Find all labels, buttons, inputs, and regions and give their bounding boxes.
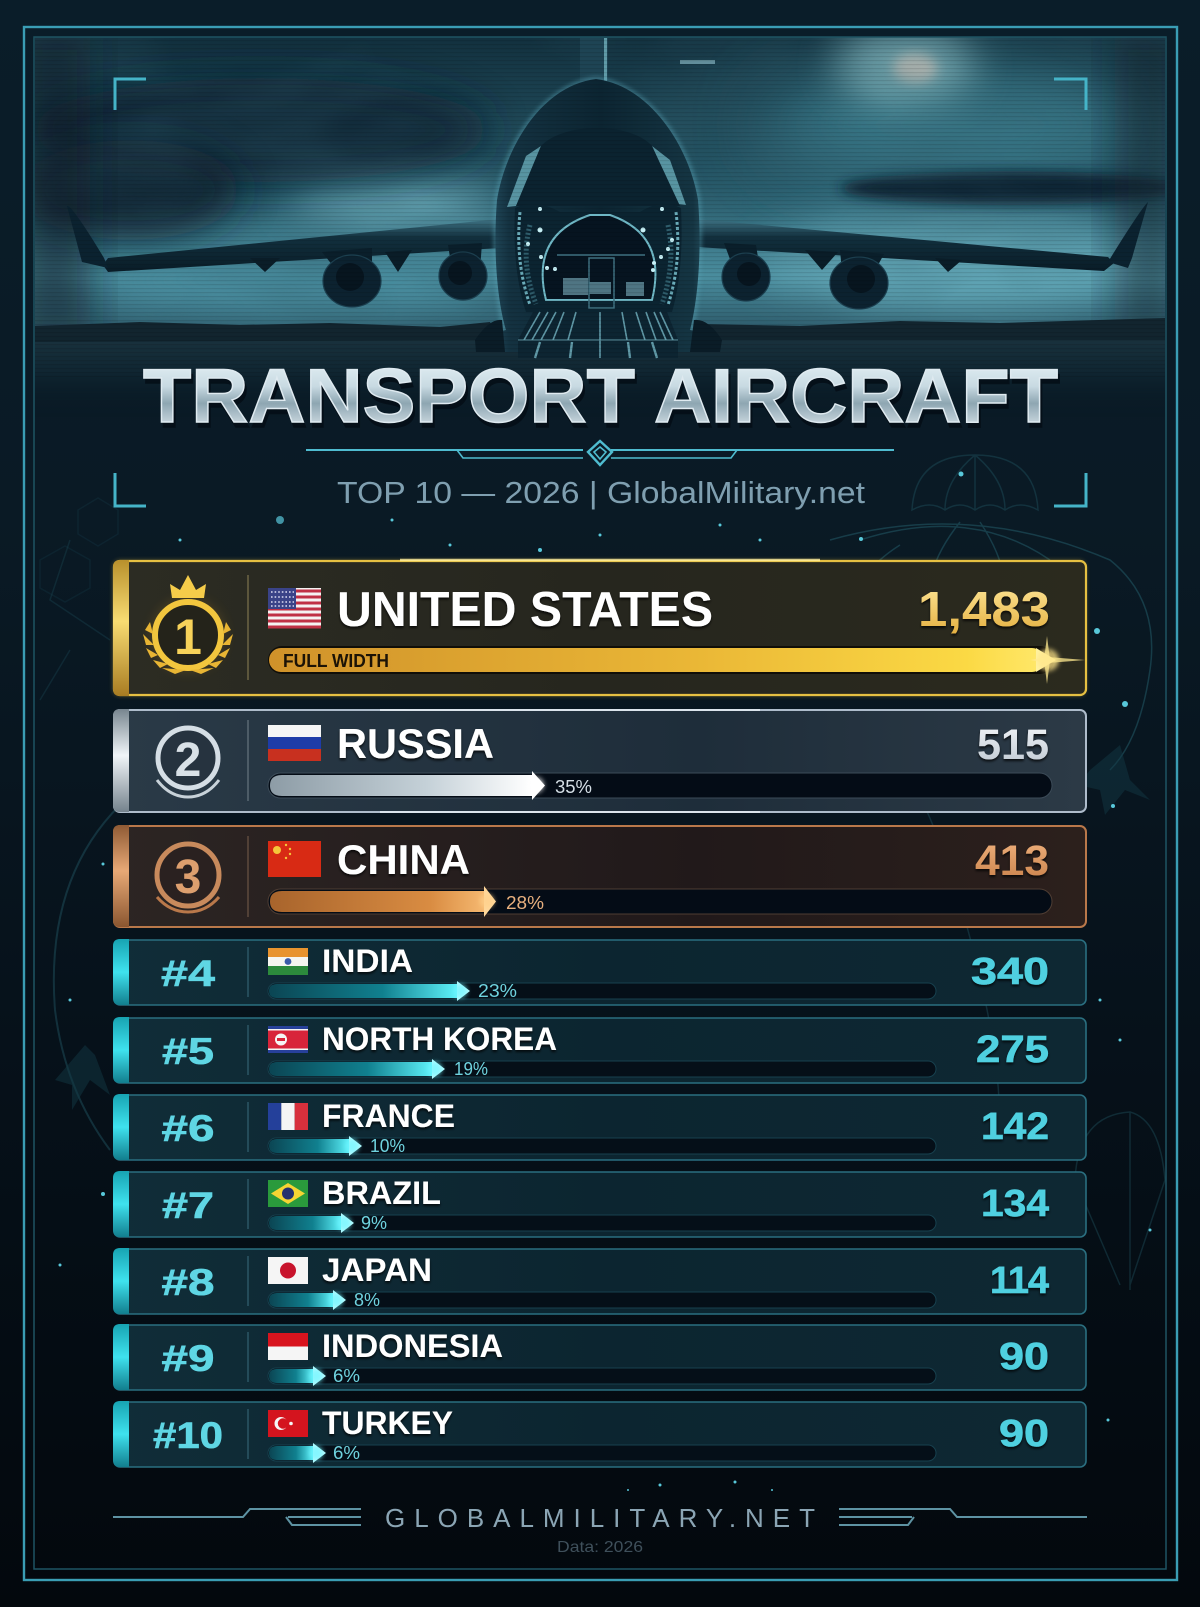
landing gear: [475, 320, 722, 352]
flag: China: [268, 841, 321, 877]
panel: rank 2 Russia: [113, 709, 1086, 812]
hexagons: [40, 498, 118, 602]
progress bar: [268, 1366, 936, 1386]
country name: FRANCE: [322, 1098, 455, 1134]
progress bar: [268, 981, 936, 1001]
progress bar: [268, 1213, 936, 1233]
progress bar: 19%: [454, 1059, 488, 1079]
footer site name: GLOBALMILITARY.NET: [385, 1503, 815, 1533]
medal: gold 1: 1: [174, 609, 202, 665]
particles: [58, 472, 1152, 1491]
rank label: #10: [153, 1415, 223, 1456]
value: 134: [981, 1183, 1049, 1225]
progress bar: [268, 1443, 936, 1463]
rim glow: [496, 79, 596, 340]
data note: Data: 2026: [557, 1539, 643, 1556]
flag: Brazil: [268, 1180, 308, 1207]
rank label: #6: [162, 1108, 214, 1149]
corner brackets: [115, 79, 1086, 506]
panel: rank 9 Indonesia: [113, 1324, 1086, 1390]
value: 275: [976, 1029, 1049, 1071]
medal: silver 2: 2: [175, 734, 201, 787]
fuselage: [480, 79, 722, 352]
flag: France: [268, 1103, 308, 1130]
left wing: [103, 219, 500, 272]
progress bar: 35%: [555, 777, 592, 797]
country name: INDIA: [322, 943, 413, 979]
cargo bay: [514, 204, 682, 312]
panel: rank 4 India: [113, 939, 1086, 1005]
flag: USA: [268, 588, 321, 628]
panel: rank 3 China: [113, 825, 1086, 927]
country name: TURKEY: [322, 1405, 453, 1441]
scanline overlay: [35, 37, 1165, 377]
value: 114: [990, 1260, 1049, 1302]
panel: rank 6 France: [113, 1094, 1086, 1160]
globe arcs: [830, 524, 1152, 770]
hero: sky and runway: [35, 38, 1165, 376]
title: TRANSPORT AIRCRAFT: [145, 359, 1060, 444]
country name: UNITED STATES: [337, 583, 713, 637]
progress bar: [268, 1136, 936, 1156]
flag: North Korea: [268, 1026, 308, 1053]
bay lights: [526, 207, 674, 272]
progress bar: [268, 636, 1085, 684]
flag: Indonesia: [268, 1333, 308, 1360]
upper door: [516, 128, 680, 206]
background motif: parachutes, globe and planes: [40, 455, 1165, 1290]
medal: bronze 3: 3: [175, 851, 201, 904]
parachute lower: [1075, 1112, 1165, 1290]
flag: Russia: [268, 725, 321, 761]
value: 340: [971, 951, 1049, 993]
flag: Japan: [268, 1257, 308, 1284]
tail fin: [580, 38, 608, 86]
engines: [323, 252, 888, 309]
panel: rank 5 North Korea: [113, 1017, 1086, 1083]
pylons: [322, 243, 884, 280]
footer ornaments: [113, 1509, 1087, 1525]
rank label: #8: [162, 1262, 214, 1303]
right wing: [696, 219, 1114, 271]
rank label: #9: [162, 1338, 214, 1379]
winglets: [67, 202, 1148, 268]
country name: JAPAN: [322, 1252, 432, 1288]
country name: RUSSIA: [337, 720, 494, 767]
country name: NORTH KOREA: [322, 1021, 557, 1057]
background planes: [55, 745, 1150, 1110]
progress bar: 6%: [333, 1443, 360, 1463]
progress bar: [268, 771, 1052, 800]
country name: BRAZIL: [322, 1175, 441, 1211]
progress bar: 23%: [478, 981, 517, 1001]
panel: rank 7 Brazil: [113, 1171, 1086, 1237]
value: 515: [977, 721, 1049, 769]
panel: rank 8 Japan: [113, 1248, 1086, 1314]
progress bar: 10%: [370, 1136, 405, 1156]
parachute upper: [912, 455, 1038, 510]
loading ramp: [518, 312, 678, 358]
progress bar: 8%: [354, 1290, 380, 1310]
value: 142: [981, 1106, 1049, 1148]
progress bar: 9%: [361, 1213, 387, 1233]
subtitle: TOP 10 — 2026 | GlobalMilitary.net: [337, 475, 865, 510]
medal: gold 1: [143, 575, 233, 674]
progress bar: [268, 886, 1052, 917]
progress bar: 28%: [506, 893, 544, 913]
progress bar: [268, 1059, 936, 1079]
country name: INDONESIA: [322, 1328, 503, 1364]
value: 90: [999, 1336, 1049, 1378]
value: 90: [999, 1413, 1049, 1455]
rank label: #5: [162, 1031, 214, 1072]
cargo pallets: [563, 278, 644, 296]
transport aircraft: [67, 38, 1148, 358]
flag: Turkey: [268, 1410, 308, 1437]
title: TRANSPORT AIRCRAFT: [143, 354, 1058, 439]
panel: rank 1 United States: [113, 560, 1086, 696]
cargo door panels: [507, 146, 686, 207]
rank label: #7: [162, 1185, 214, 1226]
panel: rank 10 Turkey: [113, 1401, 1086, 1467]
medal: silver 2: [157, 728, 219, 797]
title divider: [306, 441, 894, 465]
flap fairings: [250, 250, 962, 272]
flag: India: [268, 948, 308, 975]
medal: bronze 3: [157, 844, 219, 912]
value: 413: [975, 837, 1049, 885]
value: 1,483: [918, 583, 1050, 637]
progress bar: 6%: [333, 1366, 360, 1386]
progress bar: FULL WIDTH: [283, 651, 389, 671]
rank label: #4: [161, 953, 216, 994]
progress bar: [268, 1290, 936, 1310]
country name: CHINA: [337, 836, 470, 883]
